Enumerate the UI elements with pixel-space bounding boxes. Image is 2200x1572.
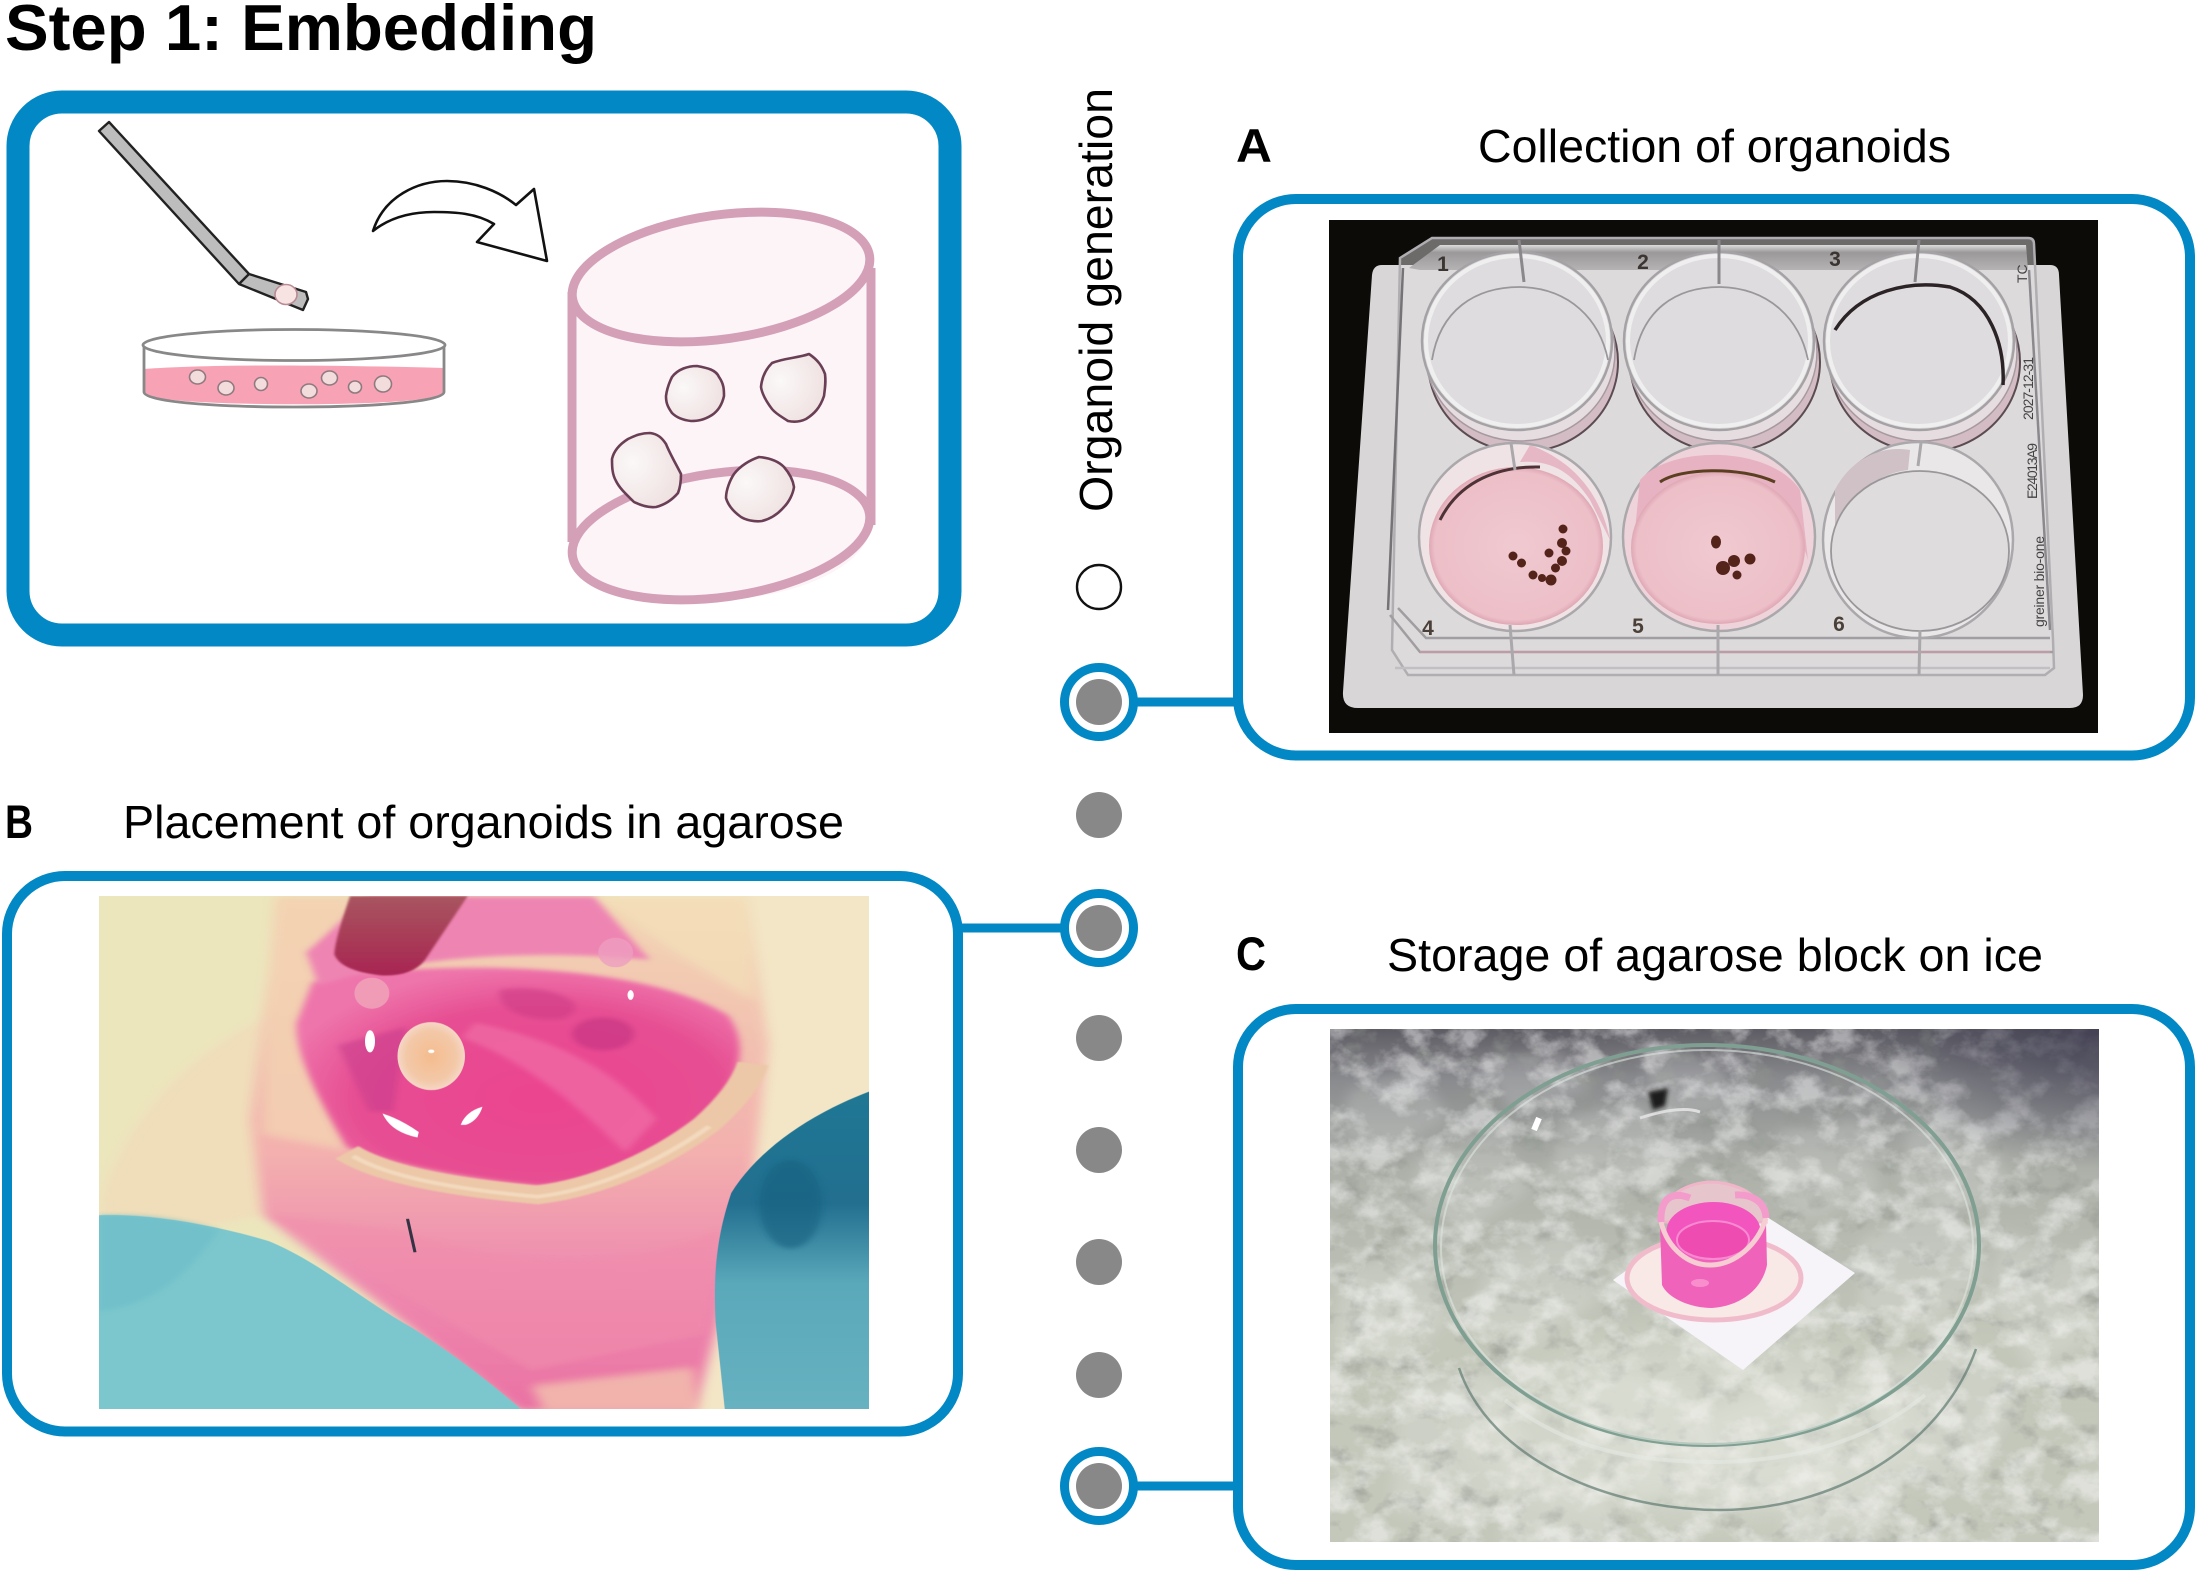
connector: timeline to panel A (1136, 698, 1236, 706)
panel frame (1238, 1009, 2190, 1565)
panel: embedding schematic (18, 102, 950, 635)
photo: organoid in pink agarose (99, 896, 870, 1411)
photo: agarose block in dish on ice (1330, 1029, 2099, 1542)
glass dish (1435, 1045, 1979, 1510)
connector: panel B to timeline (960, 924, 1062, 932)
panel frame (1238, 199, 2190, 756)
axis label: organoid generation: Organoid generation (1070, 88, 1122, 512)
timeline marker: storage (1064, 1452, 1134, 1520)
well numbers: 1 (1437, 253, 1449, 276)
timeline marker (1076, 792, 1122, 838)
panel C: ice storage photo (1238, 1009, 2190, 1565)
panel B: agarose placement photo (7, 876, 958, 1432)
heading: placement of organoids in agarose: Placement of organoids in agarose (123, 796, 844, 848)
connector: timeline to panel C (1136, 1482, 1236, 1490)
panel frame (18, 102, 950, 635)
pink agarose cup (1660, 1182, 1767, 1308)
label B: B (5, 795, 33, 848)
plate markings: greiner bio-one (2031, 536, 2047, 627)
label C: C (1236, 927, 1266, 980)
photo: six-well plate (1329, 220, 2098, 733)
label A: A (1236, 119, 1272, 172)
panel frame (7, 876, 958, 1432)
well numbers: 3 (1829, 248, 1841, 271)
white paper (1613, 1217, 1855, 1370)
upper wells (1422, 240, 2020, 452)
plate markings: E24013A9 (2024, 443, 2040, 499)
well numbers (1422, 248, 1845, 640)
timeline marker: placement (1064, 894, 1134, 962)
ice chunks (1335, 1050, 2095, 1542)
plate markings: TC (2014, 264, 2030, 283)
timeline start marker (1077, 565, 1121, 609)
timeline marker (1076, 1127, 1122, 1173)
heading: storage of agarose block on ice: Storage of agarose block on ice (1387, 929, 2043, 981)
heading: collection of organoids: Collection of organoids (1478, 120, 1951, 172)
icon: agarose cylinder with organoids (564, 195, 878, 617)
well numbers: 4 (1422, 617, 1434, 640)
arrow: transfer to agarose (373, 181, 547, 261)
plate lid and skirt (1388, 238, 2054, 675)
icon: spatula with organoid (99, 122, 308, 310)
timeline marker: collection (1064, 668, 1134, 736)
panel A: well plate photo (1238, 199, 2190, 756)
well numbers: 5 (1632, 615, 1644, 638)
well numbers: 6 (1833, 613, 1845, 636)
plate markings (2018, 265, 2047, 626)
timeline (960, 565, 1236, 1520)
organoids in wells 4 and 5 (1508, 524, 1756, 586)
timeline marker (1076, 1015, 1122, 1061)
timeline marker (1076, 1239, 1122, 1285)
timeline marker (1076, 1352, 1122, 1398)
well numbers: 2 (1637, 251, 1649, 274)
icon: culture dish with organoids (143, 330, 445, 407)
dark gap in ice (1648, 1088, 1668, 1110)
agarose disc (1627, 1236, 1801, 1320)
lower wells (1419, 442, 2013, 675)
plate markings: 2027-12-31 (2020, 357, 2036, 420)
white card under the plate (1343, 265, 2083, 708)
